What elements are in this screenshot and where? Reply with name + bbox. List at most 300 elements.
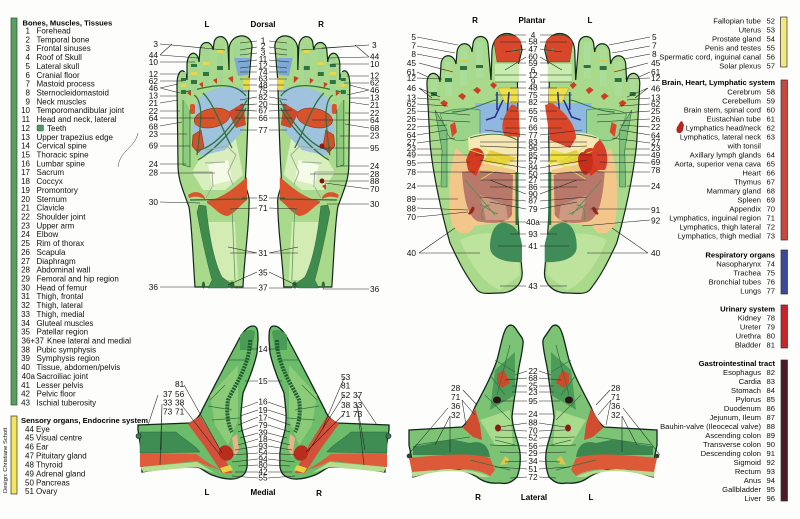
- callout numbers: 40: [651, 248, 661, 258]
- list of items: [659, 16, 775, 70]
- callout numbers: 55: [258, 472, 268, 482]
- callout numbers: 82: [258, 92, 268, 102]
- list of items: Cardia: [739, 377, 762, 386]
- list of items: 13: [21, 133, 31, 142]
- heading: L: [205, 20, 210, 29]
- legend: reproductive: [659, 16, 787, 70]
- list of items: 66: [767, 168, 775, 178]
- list of items: 86: [767, 404, 775, 413]
- list of items: 54: [767, 34, 775, 44]
- callout numbers: 2: [261, 41, 266, 51]
- callout numbers: 77: [528, 130, 538, 140]
- callout numbers: 12: [370, 70, 380, 80]
- list of items: 46: [25, 443, 34, 452]
- callout numbers: 93: [258, 441, 268, 451]
- callout numbers: 71: [451, 392, 461, 402]
- list of items: 21: [21, 204, 31, 213]
- callout numbers: 13: [651, 92, 661, 102]
- callout numbers: 84: [528, 162, 538, 172]
- list of items: Cervical spine: [36, 142, 87, 151]
- callout numbers: 71: [258, 203, 268, 213]
- callout numbers: 33: [163, 398, 173, 408]
- list of items: 52: [767, 16, 775, 26]
- callout numbers: 6: [531, 65, 536, 75]
- list of items: [21, 26, 131, 408]
- list of items: 12: [21, 124, 31, 133]
- callout numbers: 5: [411, 32, 416, 42]
- list of items: 63: [767, 132, 775, 142]
- list of items: Lumbar spine: [36, 159, 86, 168]
- list of items: 79: [767, 322, 775, 332]
- callout numbers: 64: [407, 130, 416, 140]
- list of items: 60: [767, 106, 775, 114]
- list of items: Eye: [36, 425, 50, 434]
- list of items: Heart: [742, 168, 762, 178]
- leader lines: [417, 35, 650, 286]
- list of items: 40a: [22, 372, 36, 381]
- list of items: Gallbladder: [722, 485, 761, 494]
- callout numbers: 75: [528, 90, 538, 100]
- list of items: Femoral and hip region: [36, 274, 119, 284]
- callout numbers: 52: [528, 432, 538, 442]
- callout numbers: 46: [407, 83, 416, 93]
- list of items: Jejunum, Ileum: [710, 413, 761, 422]
- callout numbers: 80: [258, 460, 268, 470]
- list of items: Gluteal muscles: [36, 319, 93, 328]
- list of items: Axillary lymph glands: [690, 150, 761, 160]
- list of items: Ascending colon: [705, 431, 761, 440]
- heading: Respiratory organs: [705, 250, 775, 260]
- list of items: Mastoid process: [36, 80, 95, 89]
- heading: L: [205, 488, 210, 497]
- callout numbers: 34: [528, 456, 538, 466]
- callout numbers: 71: [611, 392, 621, 402]
- list of items: 2: [26, 35, 31, 44]
- heading: [472, 16, 593, 25]
- list of items: 69: [767, 196, 775, 204]
- callout numbers: 52: [258, 193, 268, 203]
- callout numbers: 23: [149, 129, 158, 139]
- callout numbers: 67: [258, 106, 268, 116]
- list of items: Knee lateral and medial: [47, 336, 131, 346]
- list of items: 18: [21, 177, 31, 186]
- callout numbers: 43: [528, 281, 538, 291]
- callout numbers: 62: [651, 99, 661, 109]
- legend: brain, heart, lymphatic system: [662, 78, 788, 240]
- callout numbers: 64: [651, 130, 661, 140]
- list of items: 15: [21, 150, 31, 160]
- list of items: 36+37: [22, 336, 45, 346]
- callout numbers: 24: [651, 181, 661, 191]
- callout numbers: 46: [149, 83, 158, 93]
- list of items: Temporomandibular joint: [36, 106, 125, 115]
- list of items: Lateral skull: [36, 62, 79, 71]
- heading: Bones, Muscles, Tissues: [22, 18, 112, 27]
- callout numbers: 44: [370, 52, 380, 62]
- callout numbers: 37: [163, 389, 173, 399]
- list of items: 88: [767, 422, 775, 431]
- callout numbers: 28: [611, 383, 621, 393]
- callout numbers: 71: [175, 406, 185, 416]
- list of items: Sternocleidomastoid: [36, 88, 109, 98]
- list of items: Temporal bone: [36, 35, 90, 44]
- callout numbers: 7: [411, 40, 416, 50]
- list of items: 20: [21, 195, 31, 204]
- callout numbers: 91: [651, 205, 661, 215]
- list of items: Scapula: [36, 248, 66, 257]
- list of items: Symphysis region: [36, 354, 100, 363]
- list of items: 76: [767, 278, 775, 286]
- callout numbers: 16: [258, 396, 268, 406]
- list of items: 49: [25, 469, 34, 478]
- callout numbers: 25: [528, 380, 538, 390]
- list of items: 84: [767, 386, 775, 395]
- list of items: 6: [26, 71, 31, 80]
- callout numbers: [451, 366, 621, 482]
- callout numbers: 94: [258, 454, 268, 464]
- list of items: Mammary gland: [707, 186, 761, 196]
- heading: Plantar: [518, 16, 546, 25]
- list of items: 71: [767, 214, 775, 222]
- callout numbers: 21: [149, 98, 158, 108]
- list of items: 5: [26, 62, 31, 71]
- callout numbers: 70: [528, 426, 538, 436]
- list of items: Thigh, frontal: [36, 292, 83, 301]
- list of items: 73: [767, 232, 775, 240]
- callout numbers: 61: [651, 67, 661, 77]
- callout numbers: 14: [258, 344, 268, 354]
- list of items: 39: [21, 354, 31, 363]
- list of items: 93: [767, 467, 775, 476]
- list of items: 42: [21, 390, 31, 399]
- callout numbers: 39: [258, 428, 268, 438]
- list of items: 23: [21, 221, 31, 230]
- callout numbers: 28: [370, 169, 380, 179]
- callout numbers: 37: [258, 282, 268, 292]
- callout numbers: 66: [258, 113, 268, 123]
- heading: L: [589, 493, 594, 502]
- left foot medial: [136, 326, 258, 479]
- list of items: Cerebellum: [722, 96, 761, 106]
- list of items: 77: [767, 286, 775, 296]
- callout numbers: 64: [149, 113, 158, 123]
- legend: gastrointestinal tract: [660, 359, 788, 503]
- list of items: Roof of Skull: [36, 53, 82, 62]
- callout numbers: 28: [149, 168, 158, 178]
- callout numbers: 62: [370, 78, 380, 88]
- list of items: 78: [767, 314, 775, 322]
- callout numbers: 44: [149, 50, 158, 60]
- list of items: Spermatic cord, inguinal canal: [659, 52, 761, 62]
- callout numbers: 48: [528, 82, 538, 92]
- list of items: 94: [767, 476, 775, 485]
- list of items: 44: [25, 425, 34, 434]
- list of items: Cranial floor: [36, 71, 80, 80]
- list of items: Pituitary gland: [36, 452, 87, 461]
- callout numbers: 3: [261, 48, 266, 58]
- heading: Urinary system: [720, 304, 775, 314]
- callout numbers: 8: [652, 49, 657, 59]
- list of items: 95: [767, 485, 775, 494]
- callout numbers: 24: [149, 159, 158, 169]
- callout numbers: 3: [372, 40, 377, 50]
- list of items: 61: [767, 114, 775, 124]
- list of items: Urethra: [736, 332, 762, 340]
- heading: R: [316, 489, 322, 498]
- callout numbers: 89: [407, 194, 416, 204]
- gallbladder and appendix marks: [320, 144, 326, 190]
- list of items: Abdominal wall: [36, 266, 91, 275]
- list of items: Diaphragm: [36, 257, 76, 266]
- design credit: Design: Christiane Schott: [3, 427, 9, 493]
- list of items: Thoracic spine: [36, 150, 89, 160]
- panel: lateral view: [407, 325, 660, 502]
- list of items: Visual centre: [36, 434, 83, 443]
- list of items: 57: [767, 62, 775, 70]
- list of items: Sternum: [36, 195, 67, 204]
- legend: bones, muscles, tissues: [11, 18, 131, 408]
- callout numbers: 68: [528, 373, 538, 383]
- callout numbers: 61: [407, 67, 416, 77]
- list of items: 56: [767, 52, 775, 62]
- list of items: Clavicle: [36, 204, 65, 213]
- callout numbers: 33: [353, 400, 363, 410]
- callout numbers: 95: [528, 396, 538, 406]
- callout numbers: 27: [651, 137, 661, 147]
- callout numbers: 23: [651, 143, 661, 153]
- callout numbers: 64: [370, 115, 380, 125]
- list of items: Sigmoid: [734, 458, 761, 467]
- list of items: 81: [767, 340, 775, 350]
- list of items: Teeth: [47, 124, 67, 133]
- list of items: Pylorus: [736, 395, 761, 404]
- list of items: Tissue, abdomen/pelvis: [36, 363, 120, 372]
- heading: L: [588, 16, 593, 25]
- list of items: Ischial tuberosity: [36, 398, 96, 408]
- list of items: 22: [21, 212, 31, 222]
- callout numbers: 10: [149, 57, 158, 67]
- list of items: 33: [21, 310, 31, 319]
- heading: R: [472, 16, 478, 25]
- list of items: Ear: [36, 443, 49, 452]
- list of items: [709, 260, 775, 296]
- stray pen mark: [118, 133, 138, 167]
- list of items: [25, 425, 87, 496]
- callout numbers: 23: [528, 387, 538, 397]
- leader lines: [148, 349, 377, 478]
- list of items: Promontory: [36, 186, 78, 195]
- list of items: 68: [767, 186, 775, 196]
- list of items: 38: [21, 345, 31, 354]
- callout numbers: 88: [407, 204, 416, 214]
- callout numbers: 69: [149, 140, 158, 150]
- callout numbers: 57: [528, 156, 538, 166]
- list of items: 26: [21, 248, 31, 257]
- callout numbers: 58: [528, 36, 538, 46]
- left foot plantar: [544, 34, 640, 293]
- callout numbers: [407, 30, 661, 291]
- list of items: Appendix: [729, 204, 761, 214]
- callout numbers: 23: [370, 130, 380, 140]
- list of items: Thigh, medial: [36, 310, 85, 319]
- callout numbers: 30: [370, 199, 380, 209]
- list of items: 85: [767, 395, 775, 404]
- list of items: Kidney: [738, 314, 761, 322]
- list of items: 41: [21, 381, 31, 390]
- colour bar yellow: [780, 17, 787, 67]
- list of items: 53: [767, 26, 775, 34]
- list of items: 62: [767, 124, 775, 132]
- list of items: Solar plexus: [719, 62, 761, 70]
- list of items: 58: [767, 88, 775, 96]
- callout numbers: 5: [652, 32, 657, 42]
- callout numbers: 52: [341, 390, 351, 400]
- callout numbers: 29: [528, 448, 538, 458]
- callout numbers: 68: [370, 123, 380, 133]
- callout numbers: 81: [175, 379, 185, 389]
- callout numbers: 88: [528, 418, 538, 428]
- list of items: Bronchial tubes: [709, 278, 761, 286]
- callout numbers: 36: [370, 284, 380, 294]
- list of items: Thyroid: [36, 460, 63, 470]
- right foot plantar: [427, 34, 522, 293]
- panel: medial view: [136, 326, 391, 498]
- list of items: Patellar region: [36, 328, 88, 337]
- list of items: [735, 314, 775, 350]
- heading: R: [475, 493, 481, 502]
- list of items: 67: [767, 178, 775, 186]
- callout numbers: 36: [149, 282, 158, 292]
- callout numbers: 45: [407, 58, 416, 68]
- callout numbers: 68: [149, 122, 158, 132]
- list of items: 27: [21, 257, 31, 266]
- callout numbers: 25: [407, 106, 416, 116]
- list of items: 3: [26, 44, 31, 53]
- list of items: Head of femur: [36, 283, 88, 292]
- callout numbers: 10: [370, 59, 380, 69]
- callout numbers: 79: [258, 420, 268, 430]
- list of items: 92: [767, 458, 775, 467]
- list of items: Elbow: [36, 230, 59, 239]
- callout numbers: 21: [370, 100, 380, 110]
- list of items: 32: [21, 301, 31, 310]
- callout numbers: 24: [370, 161, 380, 171]
- callout numbers: 32: [611, 410, 621, 420]
- list of items: Sacrum: [36, 168, 64, 177]
- callout numbers: 25: [651, 106, 661, 116]
- list of items: 43: [21, 398, 31, 408]
- legend: urinary system: [720, 304, 788, 350]
- callout numbers: 62: [149, 76, 158, 86]
- callout numbers: 82: [528, 97, 538, 107]
- callout numbers: 12: [258, 60, 268, 70]
- list of items: Cerebrum: [727, 88, 761, 96]
- left foot lateral: [543, 325, 659, 483]
- callout numbers: 54: [258, 448, 268, 458]
- callout numbers: [163, 344, 363, 482]
- colour bar green: [11, 18, 17, 405]
- callout numbers: 7: [652, 40, 657, 50]
- list of items: 90: [767, 440, 775, 449]
- list of items: with tonsil: [727, 142, 761, 150]
- callout numbers: 20: [258, 99, 268, 109]
- heading: Medial: [251, 488, 275, 497]
- callout numbers: 23: [407, 143, 416, 153]
- callout numbers: 63: [258, 74, 268, 84]
- heading: [475, 493, 594, 502]
- list of items: Nasopharynx: [716, 260, 761, 268]
- list of items: Thigh, lateral: [36, 301, 83, 310]
- callout numbers: 50: [528, 169, 538, 179]
- callout numbers: 22: [651, 122, 661, 132]
- callout numbers: 11: [259, 54, 268, 64]
- callout numbers: 96: [528, 143, 538, 153]
- callout numbers: 13: [370, 92, 380, 102]
- list of items: 91: [767, 449, 775, 458]
- list of items: Uterus: [739, 26, 761, 34]
- callout numbers: 1: [261, 36, 266, 46]
- list of items: Lymphatics head/neck: [686, 124, 761, 132]
- callout numbers: 90: [528, 189, 538, 199]
- left foot dorsal: [177, 36, 252, 288]
- callout numbers: 32: [451, 410, 461, 420]
- list of items: 11: [22, 115, 31, 124]
- callout numbers: 65: [528, 106, 538, 116]
- list of items: 59: [767, 96, 775, 106]
- callout numbers: 86: [528, 182, 538, 192]
- callout numbers: [149, 36, 380, 294]
- heading: [205, 488, 322, 498]
- callout numbers: 12: [149, 69, 158, 79]
- list of items: Coccyx: [36, 177, 63, 186]
- list of items: Pelvic floor: [36, 390, 76, 399]
- list of items: 70: [767, 204, 775, 214]
- list of items: 45: [25, 434, 34, 443]
- callout numbers: 45: [651, 58, 661, 68]
- heading: Dorsal: [251, 20, 275, 29]
- list of items: 87: [767, 413, 775, 422]
- list of items: 17: [21, 168, 31, 177]
- callout numbers: 26: [407, 114, 416, 124]
- callout numbers: 75: [258, 86, 268, 96]
- list of items: [669, 88, 775, 240]
- list of items: 75: [767, 268, 775, 278]
- list of items: 74: [767, 260, 775, 268]
- list of items: Duodenum: [724, 404, 761, 413]
- leader lines: [160, 41, 369, 289]
- heading: [205, 20, 324, 29]
- list of items: Descending colon: [701, 449, 761, 458]
- list of items: 48: [25, 460, 34, 470]
- callout numbers: 24: [528, 409, 538, 419]
- list of items: Lymphatics, inguinal region: [669, 214, 761, 222]
- callout numbers: 62: [407, 99, 416, 109]
- list of items: 35: [21, 328, 31, 337]
- list of items: Thymus: [734, 178, 761, 186]
- list of items: 7: [26, 80, 31, 89]
- callout numbers: 73: [353, 409, 363, 419]
- callout numbers: 78: [651, 165, 661, 175]
- callout numbers: 83: [528, 137, 538, 147]
- list of items: Shoulder joint: [36, 212, 86, 222]
- list of items: 28: [21, 266, 31, 275]
- callout numbers: 27: [528, 175, 538, 185]
- callout numbers: 38: [175, 398, 185, 408]
- callout numbers: 73: [163, 406, 173, 416]
- list of items: 65: [767, 160, 775, 168]
- list of items: Frontal sinuses: [36, 44, 91, 53]
- list of items: Pubic symphysis: [36, 345, 96, 354]
